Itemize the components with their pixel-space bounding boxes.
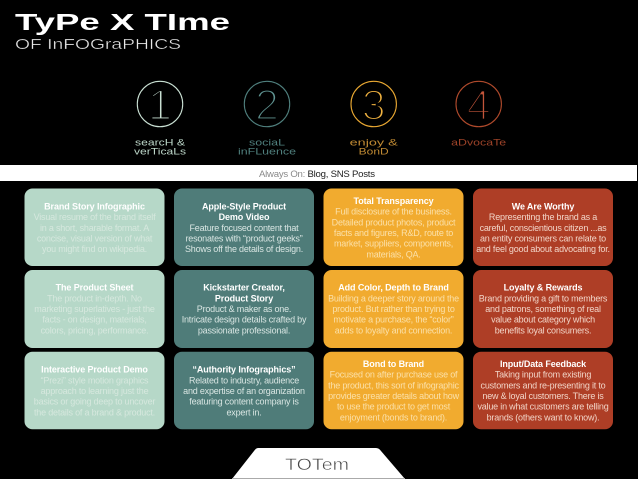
card: "Authority Infographics"	[174, 352, 314, 429]
card: Brand Story Infographic: Visual resume of the brand itself	[34, 212, 156, 222]
stage 1: search & verticals: verTicaLs	[134, 146, 186, 158]
card: Brand Story Infographic: concise, visual version of what	[37, 234, 153, 244]
stage 2: social influence	[238, 81, 296, 158]
stage 4: advocate: aDvocaTe	[451, 138, 506, 148]
stage 2: social influence: sociaL	[249, 138, 285, 148]
card: Loyalty & Rewards: Loyalty & Rewards	[504, 283, 583, 293]
stage 1: search & verticals: searcH &	[135, 138, 186, 148]
stage 1: search & verticals	[134, 81, 186, 158]
card: Add Color, Depth to Brand: adds to loyalty and connection.	[335, 325, 452, 335]
card: Loyalty & Rewards: benefits loyal consumers.	[495, 325, 591, 335]
card: Bond to Brand: to use the product to get most	[337, 402, 451, 412]
stage 1: search & verticals: 1	[148, 82, 172, 130]
card: The Product Sheet: The product in-depth. No	[47, 293, 142, 303]
card: Loyalty & Rewards	[473, 270, 613, 348]
card: Interactive Product Demo: the details of a brand & product.	[34, 407, 155, 417]
stage 3: enjoy & bond	[350, 81, 399, 158]
card: Brand Story Infographic: in a short, sharable format. A	[40, 223, 149, 233]
card: Total Transparency: materials, QA.	[366, 249, 421, 259]
card: Loyalty & Rewards: value about category which	[491, 315, 595, 325]
card: Loyalty & Rewards: Brand providing a gift to members	[479, 293, 608, 303]
card: Add Color, Depth to Brand: Add Color, Depth to Brand	[338, 283, 449, 293]
always on band: Always On: Blog, SNS Posts	[259, 169, 375, 180]
card: Input/Data Feedback: Taking input from existing	[495, 370, 591, 380]
card: Brand Story Infographic: Brand Story Infographic	[44, 202, 145, 212]
card: "Authority Infographics": expert in.	[226, 407, 262, 417]
card: Add Color, Depth to Brand: motivate a purchase, the “color”	[333, 315, 454, 325]
card: Total Transparency: Detailed product photos, product	[332, 217, 456, 227]
card: Apple-Style Product Demo Video: Shows off the details of design.	[185, 244, 303, 254]
card: Add Color, Depth to Brand: Building a deeper story around the	[328, 293, 459, 303]
card: Kickstarter Creator, Product Story: Intricate design details crafted by	[182, 315, 307, 325]
card: The Product Sheet: The Product Sheet	[56, 283, 134, 293]
card: The Product Sheet: colors, pricing, performance.	[41, 325, 148, 335]
card: Brand Story Infographic	[24, 188, 164, 266]
card: Kickstarter Creator, Product Story: Product & maker as one.	[197, 304, 291, 314]
stage 3: enjoy & bond: 3	[362, 82, 386, 130]
card: Bond to Brand: enjoyment (bonds to brand).	[340, 412, 447, 422]
card: Input/Data Feedback: customers and re-presenting it to	[481, 380, 606, 390]
always on band	[0, 165, 637, 181]
stage 2: social influence: inFLuence	[238, 146, 296, 158]
card: Total Transparency	[324, 188, 464, 266]
stage 3: enjoy & bond: BonD	[359, 146, 389, 158]
card: Apple-Style Product Demo Video: Apple-Style Product	[202, 202, 286, 212]
card: Input/Data Feedback: brands (others want to know).	[487, 412, 599, 422]
card: Kickstarter Creator, Product Story	[174, 270, 314, 348]
card: "Authority Infographics": and expertise of an organization	[183, 386, 305, 396]
card: Total Transparency: Full disclosure of the business.	[335, 207, 452, 217]
card: We Are Worthy	[473, 188, 613, 266]
totem logo tab	[232, 448, 405, 479]
card: The Product Sheet: facts - on design, materials,	[42, 315, 147, 325]
card: Input/Data Feedback: new & loyal customers. There is	[482, 391, 604, 401]
card: We Are Worthy: careful, conscientious citizen ...as	[480, 223, 607, 233]
card: Bond to Brand: provides greater details about how	[328, 391, 460, 401]
card: Interactive Product Demo: basics or going deep to uncover	[34, 397, 155, 407]
card: Interactive Product Demo	[24, 352, 164, 429]
card: "Authority Infographics": “Authority Infographics”	[192, 365, 296, 375]
card: Add Color, Depth to Brand	[324, 270, 464, 348]
title: TyPe X TIme	[15, 9, 230, 35]
card: We Are Worthy: Representing the brand as a	[489, 212, 597, 222]
card: Bond to Brand: the product, this sort of infographic	[328, 380, 460, 390]
card: Input/Data Feedback: value in what customers are telling	[477, 402, 609, 412]
card: We Are Worthy: We Are Worthy	[512, 202, 574, 212]
card: Apple-Style Product Demo Video: resonates with “product geeks”	[185, 234, 303, 244]
card: Bond to Brand	[324, 352, 464, 429]
card: Total Transparency: facts and figures, R&D, route to	[334, 228, 453, 238]
card: Kickstarter Creator, Product Story: Kickstarter Creator,	[203, 283, 285, 293]
card: Bond to Brand: Focused on after purchase use of	[330, 370, 458, 380]
card: Interactive Product Demo: approach to learning just the	[41, 386, 149, 396]
stage 2: social influence: 2	[255, 82, 279, 130]
card: We Are Worthy: an entity consumers can relate to	[480, 234, 606, 244]
card: Brand Story Infographic: you might find on wikipedia.	[42, 244, 147, 254]
card: Apple-Style Product Demo Video: Demo Video	[219, 212, 270, 222]
card: Add Color, Depth to Brand: product. But rather than trying to	[332, 304, 455, 314]
stage 3: enjoy & bond: enjoy &	[350, 138, 399, 148]
card: Interactive Product Demo: “Prezi” style motion graphics	[41, 375, 149, 385]
totem logo tab: TOTem	[285, 455, 349, 474]
card: "Authority Infographics": Related to industry, audience	[189, 375, 299, 385]
title	[15, 9, 230, 53]
card: Apple-Style Product Demo Video: Feature focused content that	[190, 223, 299, 233]
card: The Product Sheet	[24, 270, 164, 348]
card: Total Transparency: Total Transparency	[353, 196, 434, 206]
stage 4: advocate	[451, 81, 506, 148]
card: Input/Data Feedback: Input/Data Feedback	[500, 359, 587, 369]
card: Loyalty & Rewards: and patrons, something of real	[485, 304, 601, 314]
card: Bond to Brand: Bond to Brand	[363, 359, 424, 369]
stage 4: advocate: 4	[467, 82, 491, 130]
card: Apple-Style Product Demo Video	[174, 188, 314, 266]
card: Kickstarter Creator, Product Story: passionate professional.	[198, 325, 290, 335]
subtitle: OF InFOGraPHICS	[15, 36, 181, 53]
card: "Authority Infographics": featuring content company is	[189, 397, 299, 407]
card: The Product Sheet: marketing superlatives - just the	[34, 304, 155, 314]
card: We Are Worthy: and feel good about advocating for.	[476, 244, 610, 254]
card: Input/Data Feedback	[473, 352, 613, 429]
card: Kickstarter Creator, Product Story: Product Story	[215, 293, 273, 303]
card: Interactive Product Demo: Interactive Product Demo	[41, 365, 148, 375]
card: Total Transparency: market, suppliers, components,	[334, 239, 453, 249]
